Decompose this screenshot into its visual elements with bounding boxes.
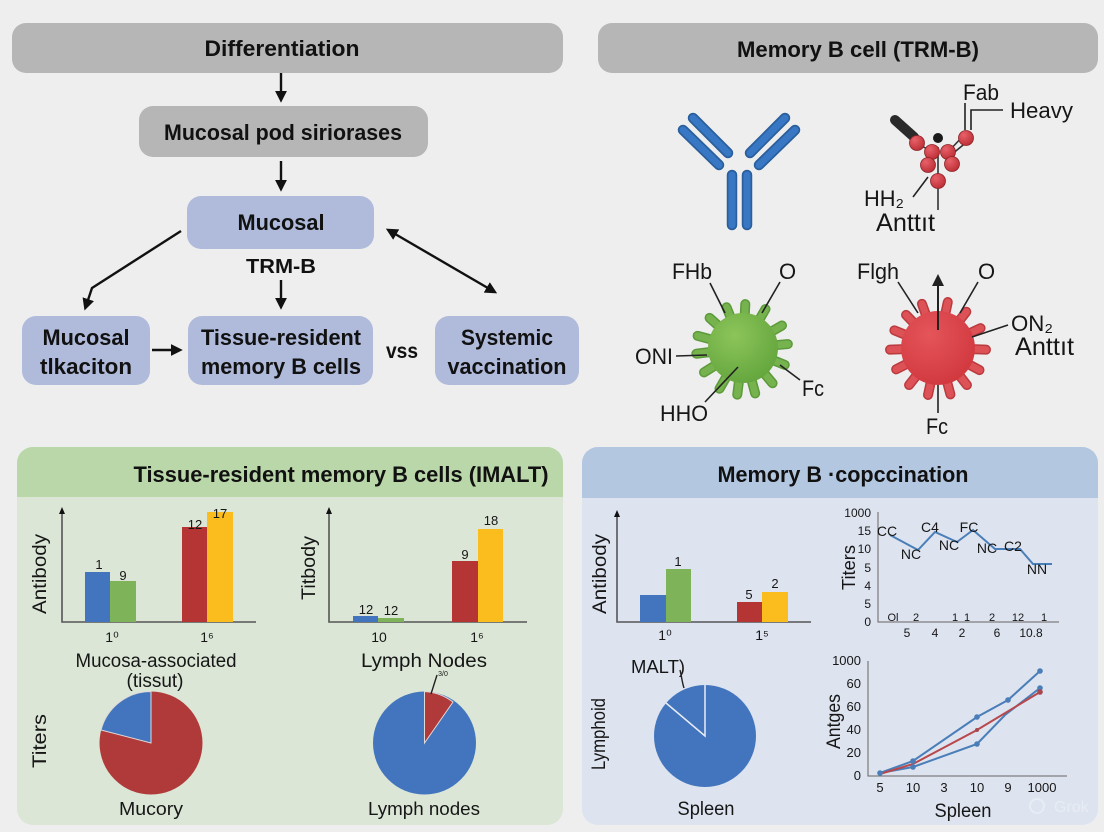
- bar chart: lymph nodes titbody: 12: [384, 603, 398, 618]
- line chart: antges vs spleen: 0: [854, 768, 861, 783]
- heading: Memory B copccination: Memory B ·copccination: [718, 462, 968, 487]
- label: Lymphoid: Lymphoid: [589, 698, 610, 770]
- pie chart: lymph nodes: 3/0: [438, 671, 448, 678]
- line chart: antges vs spleen: 5: [876, 780, 884, 795]
- callout lines: molecule: [913, 103, 1003, 197]
- arrow: mucosal to mucosal activation: [86, 231, 181, 306]
- label: HHO: HHO: [660, 401, 708, 426]
- line chart: antges vs spleen: 1000: [832, 653, 861, 668]
- line chart: titers: NN: [1027, 561, 1047, 577]
- bar chart: lymph nodes titbody: 9: [461, 547, 469, 562]
- box: Tissue-resident memory B cells: Tissue-resident: [201, 325, 362, 350]
- box: Systemic vaccination: vaccination: [448, 354, 566, 379]
- line chart: antges vs spleen: Antges: [824, 694, 845, 749]
- line chart: titers: 1: [952, 612, 958, 624]
- heading: Memory B cell (TRM-B): Memory B cell (TRM-B): [737, 37, 979, 62]
- label: Titers: Titers: [30, 714, 51, 768]
- bar chart: mucosa-associated antibody: 12: [188, 517, 202, 532]
- label: HH2: HH₂: [864, 186, 904, 211]
- line chart: titers: Ol: [888, 612, 898, 624]
- line chart: antges vs spleen: 20: [847, 745, 861, 760]
- line chart: antges vs spleen: 1000: [1028, 780, 1056, 795]
- bar chart: lymph nodes titbody: 12: [359, 602, 373, 617]
- line chart: titers: Titers: [839, 545, 859, 590]
- box: Mucosal tlkaciton: [22, 316, 150, 385]
- bar chart: mucosa-associated antibody: 1⁰: [105, 629, 119, 645]
- line chart: titers: [839, 506, 1059, 640]
- line chart: antges vs spleen: 60: [847, 699, 861, 714]
- callout lines: red cell: [898, 282, 1008, 413]
- watermark: Grok: Grok: [1054, 799, 1090, 816]
- line chart: titers: 4: [932, 626, 939, 640]
- line chart: titers: CC: [877, 523, 897, 539]
- line chart: titers: 10.8: [1019, 626, 1043, 640]
- bar chart: antibody: 1⁵: [755, 627, 769, 643]
- heading: Differentiation: [12, 23, 563, 73]
- callout lines: green cell: [676, 282, 800, 402]
- label: O: O: [779, 259, 796, 284]
- bar chart: lymph nodes titbody: 18: [484, 513, 498, 528]
- bar chart: lymph nodes titbody: 10: [371, 629, 387, 645]
- caption: Mucory: Mucory: [119, 799, 183, 819]
- label: FHb: FHb: [672, 259, 712, 284]
- label: Fab: Fab: [963, 80, 999, 105]
- line chart: titers: NC: [939, 537, 959, 553]
- bar chart: antibody: [590, 510, 811, 643]
- line chart: titers: 1: [964, 612, 970, 624]
- panel: Memory B cell structures: [598, 23, 1098, 439]
- label: Anttit: Anttıt: [876, 209, 935, 237]
- line chart: titers: 0: [864, 615, 871, 629]
- caption: Mucosa-associated (tissut): [76, 651, 236, 692]
- line chart: antges vs spleen: 10: [970, 780, 984, 795]
- label: Flgh: Flgh: [857, 259, 899, 284]
- box: Mucosal pod siriorases: [139, 106, 428, 157]
- heading: Differentiation: Differentiation: [204, 36, 360, 61]
- icon: red spiky cell: [890, 302, 986, 395]
- line chart: titers: 1: [1041, 612, 1047, 624]
- box: Systemic vaccination: Systemic: [461, 325, 553, 350]
- bar chart: antibody: 1⁰: [658, 627, 672, 643]
- line chart: antges vs spleen: 3: [940, 780, 948, 795]
- bar chart: antibody: 5: [745, 587, 753, 602]
- box: Systemic vaccination: [435, 316, 579, 385]
- arrow: double-headed mucosal to systemic: [390, 231, 493, 291]
- box: Mucosal: [187, 196, 374, 249]
- panel: Tissue-resident memory B cells: [17, 447, 563, 825]
- label: TRM-B: TRM-B: [246, 256, 316, 278]
- icon: blue Y antibody: [683, 118, 795, 225]
- pie chart: mucosa: [100, 691, 202, 794]
- bar chart: lymph nodes titbody: [299, 507, 527, 645]
- pie chart: spleen: [654, 670, 756, 787]
- label: MALT): MALT): [631, 657, 685, 677]
- label: Anttit red: Anttıt: [1015, 333, 1074, 361]
- arrow: mucosal to tissue-resident: [280, 280, 282, 305]
- line chart: titers: 1000: [844, 506, 871, 520]
- caption: Lymph Nodes: Lymph Nodes: [361, 651, 487, 672]
- bar chart: antibody: 1: [674, 554, 682, 569]
- line chart: titers: 5: [864, 561, 871, 575]
- box: Mucosal tlkaciton: Mucosal: [42, 325, 130, 350]
- caption: Spleen: Spleen: [678, 799, 734, 820]
- line chart: titers: 12: [1012, 612, 1024, 624]
- label: ON2: ON₂: [1011, 311, 1053, 336]
- bar chart: mucosa-associated antibody: 1⁶: [200, 629, 214, 645]
- caption: Lymph nodes: Lymph nodes: [368, 799, 480, 819]
- line chart: antges vs spleen: 40: [847, 722, 861, 737]
- heading: Memory B copccination: [582, 447, 1098, 498]
- panel: Memory B copccination: [582, 447, 1098, 825]
- caption: Mucosa-associated (tissut): Mucosa-associated: [76, 651, 236, 672]
- arrow: activation to tissue-resident: [152, 349, 178, 351]
- arrow: pod to mucosal: [280, 161, 282, 187]
- heading: Memory B cell (TRM-B): [598, 23, 1098, 73]
- caption: Spleen x-axis: Spleen: [934, 801, 992, 822]
- label: Fc: Fc: [802, 376, 824, 401]
- line chart: titers: 2: [959, 626, 966, 640]
- bar chart: mucosa-associated antibody: 9: [119, 568, 127, 583]
- arrow: up from red cell: [937, 280, 939, 330]
- bar chart: mucosa-associated antibody: 1: [95, 557, 103, 572]
- bar chart: antibody: 2: [771, 576, 779, 591]
- line chart: titers: 2: [989, 612, 995, 624]
- line chart: titers: 5: [864, 597, 871, 611]
- label: Heavy: Heavy: [1010, 98, 1073, 123]
- line chart: titers: NC: [901, 546, 921, 562]
- box: Mucosal pod siriorases: Mucosal pod siriorases: [164, 120, 402, 145]
- bar chart: lymph nodes titbody: 1⁶: [470, 629, 484, 645]
- line chart: antges vs spleen: 60: [847, 676, 861, 691]
- bar chart: lymph nodes titbody: Titbody: [299, 535, 320, 600]
- label: Fc red: Fc: [926, 414, 948, 439]
- line chart: titers: C2: [1004, 538, 1022, 554]
- box: Mucosal: Mucosal: [238, 210, 324, 235]
- line chart: titers: FC: [960, 519, 978, 535]
- line chart: titers: 10: [858, 542, 871, 556]
- line chart: titers: 6: [994, 626, 1001, 640]
- line chart: titers: 5: [904, 626, 911, 640]
- line chart: titers: C4: [921, 519, 939, 535]
- icon: red ball-and-stick molecule: [895, 120, 974, 210]
- line chart: antges vs spleen: [824, 653, 1067, 795]
- line chart: titers: 15: [858, 524, 871, 538]
- pie chart: lymph nodes: [373, 671, 476, 794]
- heading: Tissue-resident memory B cells (IMALT): Tissue-resident memory B cells (IMALT): [134, 462, 548, 487]
- heading: Tissue-resident memory B cells (IMALT): [17, 447, 563, 497]
- bar chart: mucosa-associated antibody: 17: [213, 506, 227, 521]
- label: O red: O: [978, 259, 995, 284]
- line chart: titers: NC: [977, 540, 997, 556]
- box: Tissue-resident memory B cells: memory B cells: [201, 354, 361, 379]
- line chart: titers: 4: [864, 579, 871, 593]
- label: vss: vss: [386, 340, 418, 363]
- bar chart: mucosa-associated antibody: [30, 506, 256, 645]
- line chart: antges vs spleen: 9: [1004, 780, 1012, 795]
- caption: Mucosa-associated (tissut): (tissut): [126, 671, 184, 692]
- label: ONI: ONI: [635, 344, 673, 369]
- arrow: differentiation to pod: [280, 73, 282, 98]
- icon: green spiky cell: [696, 304, 788, 395]
- bar chart: antibody: Antibody: [590, 533, 611, 614]
- bar chart: mucosa-associated antibody: Antibody: [30, 533, 51, 614]
- line chart: antges vs spleen: 10: [906, 780, 920, 795]
- box: Tissue-resident memory B cells: [188, 316, 373, 385]
- watermark: Grok: [1030, 799, 1090, 816]
- box: Mucosal tlkaciton: tlkaciton: [40, 354, 132, 379]
- line chart: titers: 2: [913, 612, 919, 624]
- panel: differentiation flowchart: [12, 23, 579, 385]
